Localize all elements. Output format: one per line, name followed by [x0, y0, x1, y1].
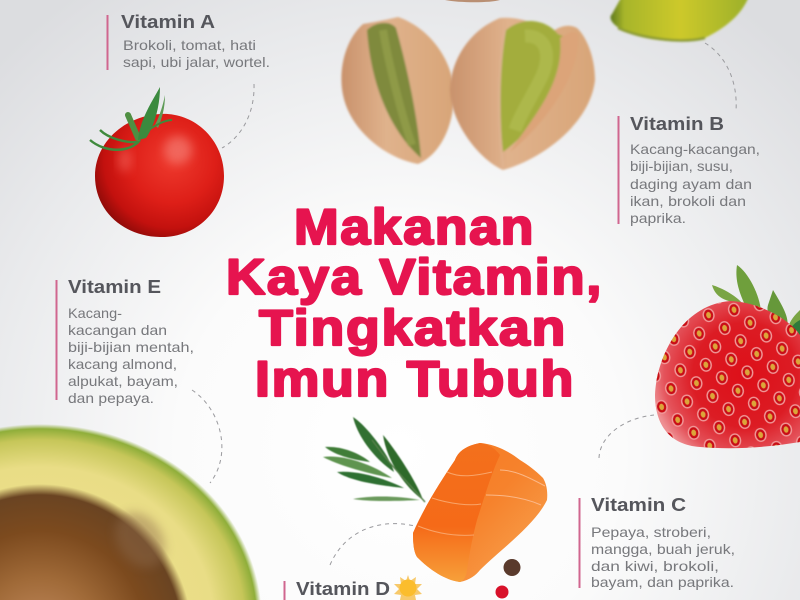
title: Tingkatkan [259, 300, 567, 356]
icon: salmon [413, 443, 547, 582]
title: Kaya Vitamin, [226, 249, 603, 305]
heading block: Vitamin E: Kacang- [68, 306, 122, 321]
heading block: Vitamin A: sapi, ubi jalar, wortel. [123, 55, 270, 70]
heading block: Vitamin A: Brokoli, tomat, hati [123, 38, 256, 53]
title [226, 199, 603, 407]
heading block: Vitamin A: Vitamin A [121, 11, 215, 32]
heading block: Vitamin B: daging ayam dan [630, 177, 752, 192]
icon: peppercorn brown [504, 559, 520, 576]
dashed connector: Vitamin B [705, 43, 736, 111]
dashed connector: Vitamin A [222, 84, 254, 148]
heading block: Vitamin C: Vitamin C [591, 494, 686, 515]
icon: pistachio kernel top right [610, 0, 749, 41]
heading block: Vitamin B [618, 113, 760, 226]
icon: pistachio right [450, 18, 595, 170]
heading block: Vitamin E: biji-bijian mentah, [68, 340, 194, 355]
heading block: Vitamin E: kacang almond, [68, 357, 177, 372]
icon: pistachio sliver top [445, 0, 500, 2]
heading block: Vitamin B: Kacang-kacangan, [630, 142, 760, 157]
icon: pistachio left [341, 17, 454, 164]
heading block: Vitamin A [106, 11, 270, 70]
title: Imun Tubuh [255, 351, 575, 407]
heading block: Vitamin C: mangga, buah jeruk, [591, 542, 735, 557]
heading block: Vitamin B: Vitamin B [630, 113, 724, 134]
dashed connector: Vitamin E [192, 390, 222, 483]
heading block: Vitamin C: bayam, dan paprika. [591, 575, 734, 590]
heading block: Vitamin B: ikan, brokoli dan [630, 194, 746, 209]
heading block: Vitamin E: alpukat, bayam, [68, 374, 178, 389]
heading block: Vitamin B: biji-bijian, susu, [630, 159, 733, 174]
icon: strawberry [655, 265, 800, 448]
icon: avocado [0, 420, 264, 600]
heading block: Vitamin E: dan pepaya. [68, 391, 154, 406]
heading block: Vitamin C [578, 494, 735, 590]
heading block: Vitamin E [56, 276, 194, 406]
heading block: Vitamin D: Vitamin D [296, 578, 390, 599]
heading block: Vitamin E: Vitamin E [68, 276, 161, 297]
heading block: Vitamin E: kacangan dan [68, 323, 167, 338]
heading block: Vitamin C: Pepaya, stroberi, [591, 525, 711, 540]
icon: rosemary sprig [323, 417, 425, 502]
icon: tomato [90, 87, 224, 237]
heading block: Vitamin C: dan kiwi, brokoli, [591, 559, 719, 574]
dashed connector: Vitamin C [599, 415, 654, 458]
icon: sun [394, 575, 422, 600]
dashed connector: Vitamin D [330, 524, 415, 565]
title: Makanan [294, 199, 535, 255]
icon: peppercorn red [496, 586, 508, 598]
heading block: Vitamin B: paprika. [630, 211, 686, 226]
